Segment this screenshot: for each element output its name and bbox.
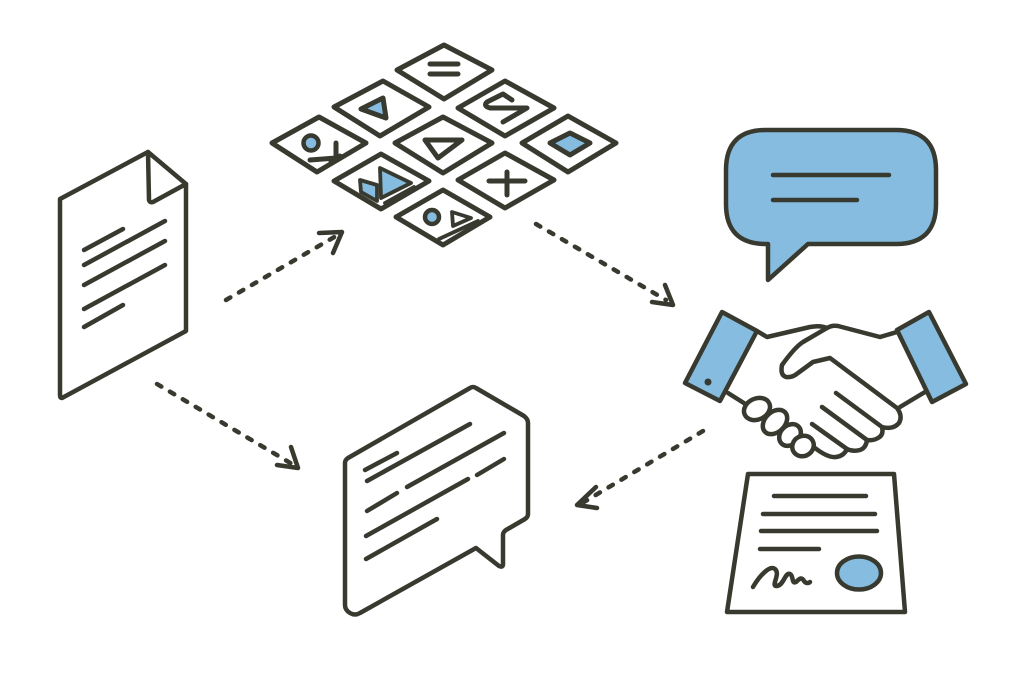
icon: speech bubble bbox=[726, 130, 936, 280]
icon: signed contract bbox=[727, 474, 905, 612]
tile: circle and strokes bbox=[272, 117, 366, 172]
signature bbox=[753, 568, 810, 587]
right hand bbox=[782, 326, 925, 457]
tile: blue diamond bbox=[522, 116, 616, 172]
icon: message bubble bbox=[345, 387, 528, 614]
tile: outlined triangle bbox=[395, 117, 492, 173]
icon: isometric tile grid bbox=[272, 45, 616, 245]
seal bbox=[837, 556, 881, 590]
tile: zigzag bbox=[458, 81, 554, 136]
arrow: handshake to message bbox=[577, 431, 703, 508]
arrow: grid to handshake bbox=[536, 224, 673, 305]
icon: handshake bbox=[685, 312, 966, 460]
left cuff bbox=[685, 312, 757, 401]
arrow: document to grid bbox=[226, 232, 342, 300]
arrow: document to message bbox=[157, 384, 298, 468]
knuckles bbox=[740, 394, 818, 460]
tile: text lines bbox=[397, 45, 492, 99]
tile: blue mountains bbox=[334, 154, 429, 209]
right cuff bbox=[897, 312, 966, 402]
tile: blue triangle bbox=[334, 81, 429, 136]
tile: cross bbox=[458, 153, 554, 208]
tile: picture bbox=[396, 190, 490, 245]
left hand bbox=[728, 326, 827, 405]
icon: source document bbox=[60, 152, 186, 398]
